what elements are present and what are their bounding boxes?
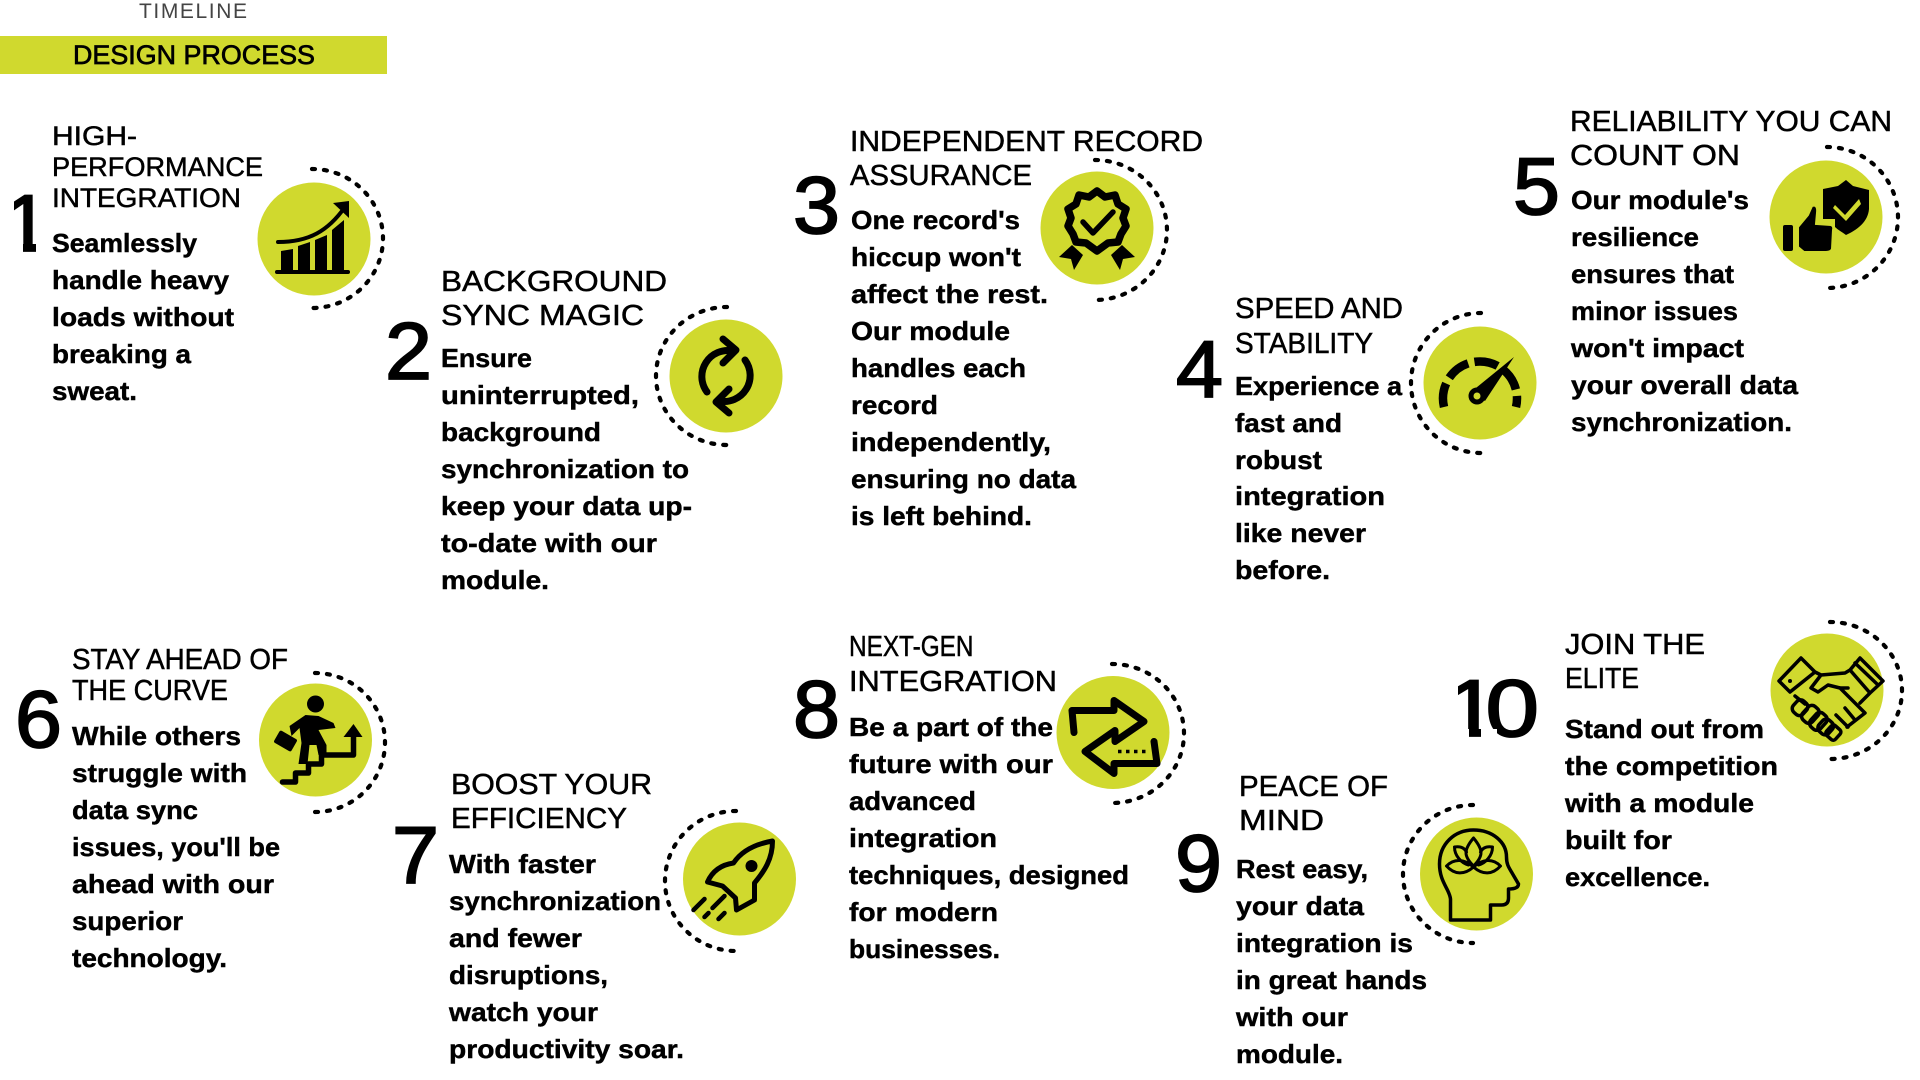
- step 7: boost your efficiency: [392, 769, 796, 1064]
- body 8: techniques, designed: [849, 860, 1129, 890]
- number 2: 2: [385, 307, 432, 397]
- number 10: 10: [1445, 662, 1539, 753]
- body 1: loads without: [52, 302, 234, 332]
- body 3: Our module: [851, 316, 1010, 346]
- number 4: 4: [1176, 325, 1223, 415]
- body 2: background: [441, 417, 601, 447]
- body 3: record: [851, 390, 938, 420]
- body 6: [72, 721, 280, 973]
- body 7: synchronization: [449, 886, 661, 916]
- body 8: [849, 712, 1129, 964]
- heading 4: SPEED AND: [1235, 293, 1403, 325]
- body 2: uninterrupted,: [441, 380, 639, 410]
- body 4: fast and: [1235, 408, 1342, 438]
- body 8: Be a part of the: [849, 712, 1053, 742]
- number 9: 9: [1175, 819, 1222, 909]
- body 6: struggle with: [72, 758, 247, 788]
- heading 4: [1235, 293, 1403, 360]
- heading 8: NEXT-GEN: [849, 630, 973, 662]
- body 3: hiccup won't: [851, 242, 1021, 272]
- step 2: background sync magic: [385, 266, 782, 595]
- step 1: high-performance integration: [3, 121, 383, 406]
- body 2: Ensure: [441, 343, 532, 373]
- body 1: Seamlessly: [52, 228, 198, 258]
- body 4: like never: [1235, 518, 1366, 548]
- body 1: handle heavy: [52, 265, 230, 295]
- body 9: integration is: [1236, 928, 1413, 958]
- heading 10: ELITE: [1565, 663, 1639, 695]
- icon: sync arrows: [656, 307, 782, 445]
- body 6: technology.: [72, 943, 227, 973]
- body 5: synchronization.: [1571, 407, 1792, 437]
- body 2: synchronization to: [441, 454, 689, 484]
- number 8: 8: [793, 665, 840, 755]
- heading 9: [1239, 771, 1388, 837]
- body 7: [448, 849, 684, 1064]
- icon: speedometer gauge: [1411, 313, 1536, 453]
- body 5: won't impact: [1570, 333, 1744, 363]
- body 3: is left behind.: [851, 501, 1032, 531]
- body 5: [1570, 185, 1799, 437]
- body 3: ensuring no data: [851, 464, 1077, 494]
- icon: rocket: [665, 811, 796, 951]
- body 8: for modern: [849, 897, 998, 927]
- body 6: ahead with our: [72, 869, 274, 899]
- title banner: design process: DESIGN PROCESS: [73, 40, 315, 70]
- heading 7: EFFICIENCY: [451, 803, 627, 835]
- body 10: the competition: [1565, 751, 1778, 781]
- body 5: your overall data: [1571, 370, 1799, 400]
- body 7: With faster: [449, 849, 596, 879]
- body 4: integration: [1235, 481, 1385, 511]
- body 8: integration: [849, 823, 997, 853]
- heading 2: [441, 266, 667, 332]
- body 4: [1235, 371, 1403, 585]
- icon: handshake: [1770, 622, 1902, 759]
- step 6: stay ahead of the curve: [15, 644, 385, 973]
- body 3: [851, 205, 1077, 531]
- heading 1: [52, 121, 263, 213]
- body 7: and fewer: [449, 923, 582, 953]
- heading 8: INTEGRATION: [849, 666, 1057, 698]
- heading 2: SYNC MAGIC: [441, 300, 644, 332]
- body 5: Our module's: [1571, 185, 1749, 215]
- body 3: handles each: [851, 353, 1026, 383]
- icon: award badge with check: [1040, 160, 1167, 300]
- body 9: [1235, 854, 1427, 1069]
- icon: businessman climbing stairs: [259, 673, 385, 812]
- heading 1: PERFORMANCE: [52, 152, 263, 182]
- heading 8: [849, 630, 1057, 698]
- body 2: to-date with our: [441, 528, 657, 558]
- icon: thumbs up and shield: [1770, 147, 1898, 288]
- heading 5: COUNT ON: [1570, 140, 1740, 172]
- body 5: minor issues: [1571, 296, 1738, 326]
- body 4: before.: [1235, 555, 1330, 585]
- step 3: independent record assurance: [793, 126, 1203, 531]
- heading 3: [850, 126, 1203, 192]
- body 6: superior: [72, 906, 183, 936]
- body 5: resilience: [1571, 222, 1699, 252]
- body 6: issues, you'll be: [72, 832, 280, 862]
- heading 3: ASSURANCE: [850, 160, 1032, 192]
- heading 10: [1565, 629, 1705, 695]
- body 2: keep your data up-: [441, 491, 692, 521]
- body 2: [441, 343, 692, 595]
- body 7: watch your: [448, 997, 598, 1027]
- body 8: advanced: [849, 786, 976, 816]
- number 5: 5: [1513, 142, 1560, 232]
- heading 3: INDEPENDENT RECORD: [850, 126, 1203, 158]
- body 10: Stand out from: [1565, 714, 1764, 744]
- body 4: robust: [1235, 445, 1322, 475]
- heading 6: [72, 644, 288, 707]
- body 6: data sync: [72, 795, 198, 825]
- number 3: 3: [793, 161, 840, 251]
- body 10: excellence.: [1565, 862, 1710, 892]
- body 7: productivity soar.: [449, 1034, 684, 1064]
- body 5: ensures that: [1571, 259, 1734, 289]
- heading 1: HIGH-: [52, 121, 137, 151]
- body 1: sweat.: [52, 376, 137, 406]
- heading 7: [451, 769, 652, 835]
- title banner: design process: [0, 36, 387, 74]
- heading 4: STABILITY: [1235, 328, 1373, 360]
- body 3: affect the rest.: [851, 279, 1048, 309]
- icon: head with lotus: [1403, 805, 1533, 943]
- heading 9: MIND: [1239, 805, 1324, 837]
- body 10: built for: [1565, 825, 1672, 855]
- number 7: 7: [392, 811, 439, 901]
- body 9: with our: [1235, 1002, 1348, 1032]
- heading 5: RELIABILITY YOU CAN: [1570, 106, 1892, 138]
- icon: rising bar chart: [258, 169, 383, 308]
- step 5: reliability you can count on: [1513, 106, 1898, 437]
- body 9: in great hands: [1236, 965, 1427, 995]
- body 3: One record's: [851, 205, 1020, 235]
- body 10: with a module: [1564, 788, 1754, 818]
- heading 9: PEACE OF: [1239, 771, 1388, 803]
- body 8: businesses.: [849, 934, 1000, 964]
- heading 10: JOIN THE: [1565, 629, 1705, 661]
- step 4: speed and stability: [1176, 293, 1536, 585]
- body 7: disruptions,: [449, 960, 608, 990]
- number 6: 6: [15, 675, 62, 765]
- heading 2: BACKGROUND: [441, 266, 667, 298]
- number 1: 1: [3, 179, 50, 269]
- body 9: module.: [1236, 1039, 1343, 1069]
- body 8: future with our: [849, 749, 1053, 779]
- heading 6: STAY AHEAD OF: [72, 644, 288, 676]
- step 10: join the elite: [1445, 622, 1902, 892]
- body 10: [1564, 714, 1778, 892]
- eyebrow: timeline: TIMELINE: [139, 0, 247, 23]
- body 1: breaking a: [52, 339, 192, 369]
- heading 6: THE CURVE: [72, 675, 228, 707]
- heading 5: [1570, 106, 1892, 172]
- body 9: your data: [1236, 891, 1365, 921]
- body 9: Rest easy,: [1236, 854, 1368, 884]
- body 2: module.: [441, 565, 549, 595]
- icon: exchange arrows: [1056, 664, 1184, 803]
- step 8: next-gen integration: [793, 630, 1184, 964]
- heading 7: BOOST YOUR: [451, 769, 652, 801]
- body 3: independently,: [851, 427, 1051, 457]
- step 9: peace of mind: [1175, 771, 1533, 1069]
- body 1: [52, 228, 234, 406]
- body 4: Experience a: [1235, 371, 1403, 401]
- body 6: While others: [72, 721, 241, 751]
- heading 1: INTEGRATION: [52, 183, 241, 213]
